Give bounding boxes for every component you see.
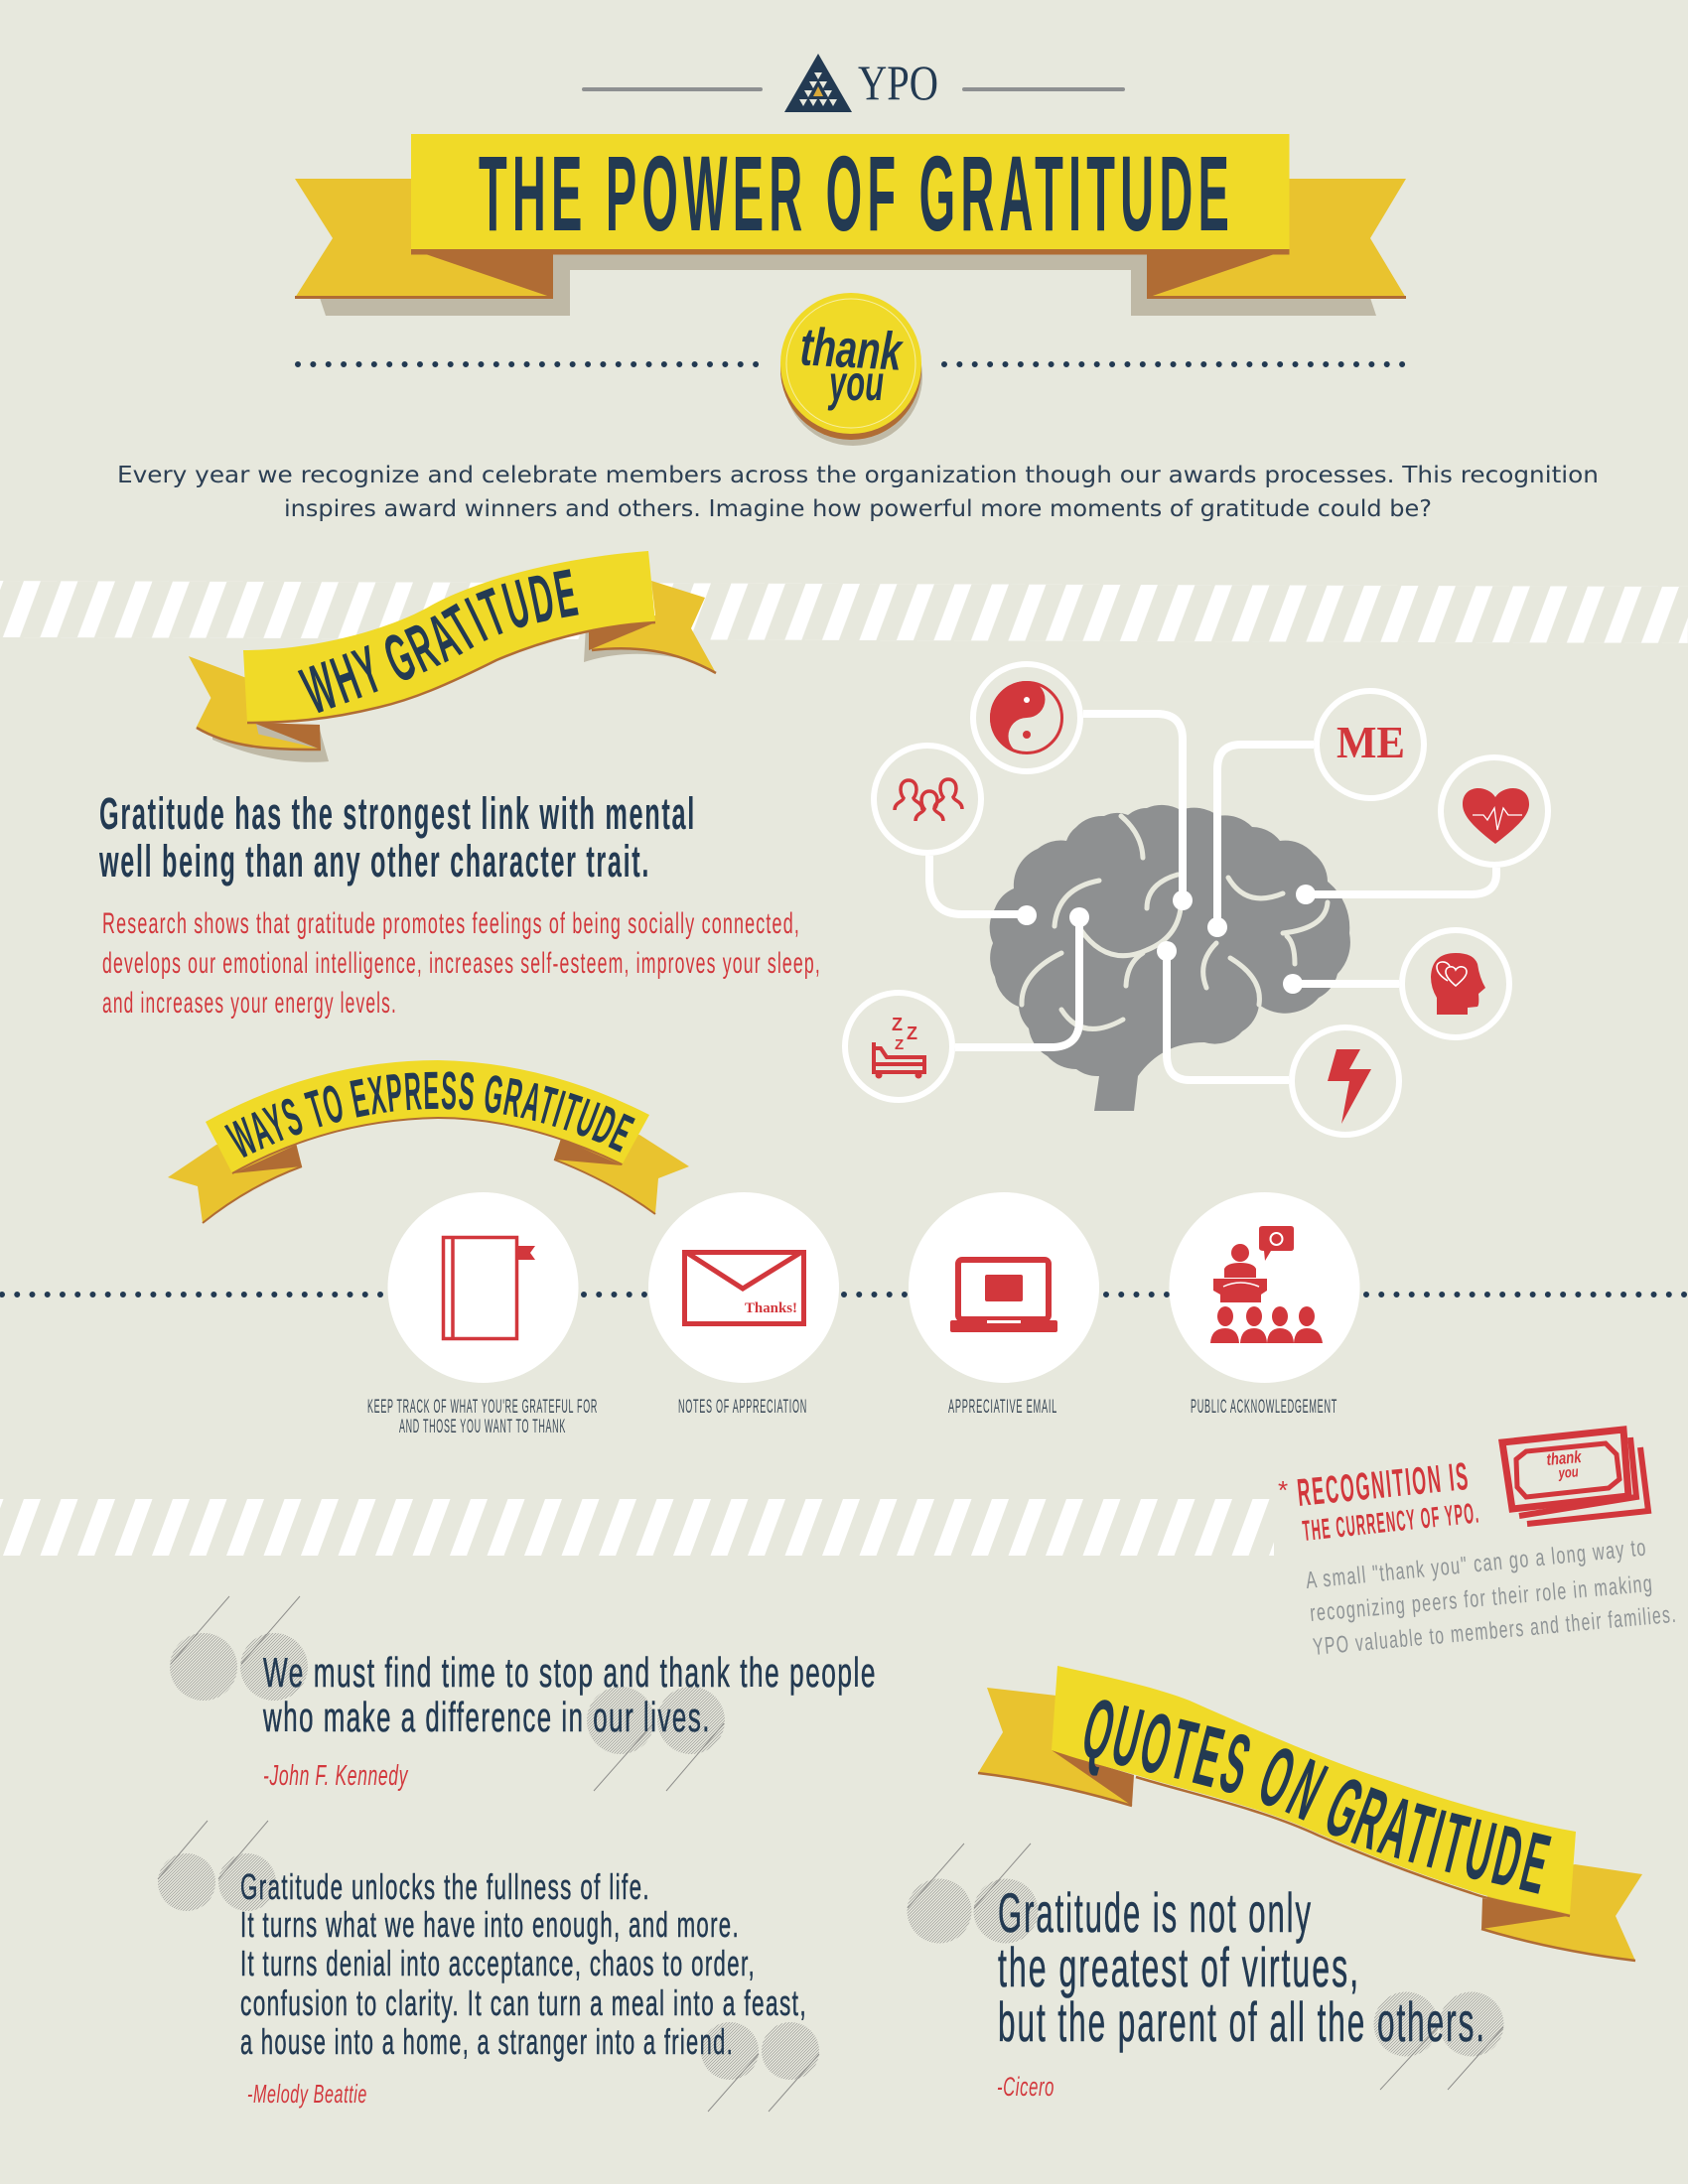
quote: Kennedy: -John F. Kennedy [263,1760,408,1792]
stripe band bottom [0,1499,1274,1556]
intro text: Every year we recognize and celebrate members across the organization though our awards processes. This recognition [117,463,1599,488]
quote: Melody Beattie: It turns denial into acceptance, chaos to order, [240,1943,756,1983]
research text: develops our emotional intelligence, increases self-esteem, improves your sleep, [102,947,821,980]
icon: bed: Z [892,1015,903,1034]
quote: Melody Beattie: Gratitude unlocks the fullness of life. [240,1866,650,1907]
logo: YPO: YPO [858,55,938,110]
ribbon text: why gratitude: WHY GRATITUDE [298,569,579,713]
item: appreciative email [909,1192,1099,1418]
ribbon: ways to express gratitude [168,1060,689,1224]
research text: Research shows that gratitude promotes feelings of being socially connected, [102,907,800,940]
quote: Melody Beattie: It turns what we have into enough, and more. [240,1904,740,1945]
callout: recognition: * [1278,1475,1288,1505]
icon: yin yang [973,664,1080,771]
icon: heart [1441,757,1548,865]
title banner [295,133,1406,316]
connector lines [929,714,1496,1080]
brain silhouette [990,805,1350,1111]
quote: Kennedy [170,1596,877,1792]
intro text: inspires award winners and others. Imagine how powerful more moments of gratitude could be? [284,496,1432,522]
quote: Cicero: the greatest of virtues, [998,1936,1360,1998]
icon: money stack [1502,1430,1648,1524]
quote marks [170,1596,725,1791]
research text: and increases your energy levels. [102,987,397,1020]
quote: Cicero [908,1843,1503,2102]
quote: Melody Beattie: a house into a home, a stranger into a friend. [240,2021,734,2062]
ribbon: quotes on gratitude [977,1666,1642,1962]
item: keep track journal: AND THOSE YOU WANT TO THANK [399,1417,566,1437]
item: notes of appreciation: NOTES OF APPRECIATION [678,1397,807,1418]
callout: recognition [1278,1430,1678,1661]
quote marks [158,1821,819,2112]
brain diagram [845,664,1548,1135]
quote: Cicero: -Cicero [997,2072,1055,2102]
icon: ME: ME [1336,717,1405,767]
item: appreciative email: APPRECIATIVE EMAIL [948,1397,1057,1418]
logo: YPO [582,54,1125,112]
text: KEEP TRACK OF WHAT YOU'RE GRATEFUL FOR [367,1397,598,1418]
dotted divider with thank-you coin [298,293,1404,446]
stripe band top [0,581,1688,643]
quote: Melody Beattie: confusion to clarity. It can turn a meal into a feast, [240,1982,807,2023]
item: public acknowledgement: PUBLIC ACKNOWLEDGEMENT [1191,1397,1337,1418]
headline: strongest link: Gratitude has the strongest link with mental [99,788,696,839]
quote marks [908,1843,1503,2090]
item: keep track journal [367,1192,598,1437]
icon: bed: Z [907,1024,917,1043]
item: notes of appreciation: Thanks! [745,1300,797,1316]
ribbon text: quotes on gratitude: QUOTES ON GRATITUDE [1084,1700,1552,1894]
icon: lightning bolt [1292,1027,1399,1135]
icon: bed: Z [895,1036,904,1053]
icon: head with hearts [1402,930,1509,1037]
headline: strongest link [98,788,696,887]
callout: recognition: RECOGNITION IS [1296,1455,1472,1515]
item: notes of appreciation [648,1192,839,1418]
dotted divider with thank-you coin: thank [798,317,906,382]
callout: recognition: you [1557,1463,1579,1482]
icon: bed [845,993,952,1100]
quote: Cicero: Gratitude is not only [998,1881,1313,1944]
research text [102,907,821,1020]
dotted line through circles [2,1292,1688,1297]
quote: Kennedy: who make a difference in our lives. [262,1694,711,1740]
icon: ME [1317,691,1424,798]
quote: Kennedy: We must find time to stop and thank the people [263,1649,877,1696]
quote: Melody Beattie [158,1821,819,2112]
intro text [117,463,1599,522]
ribbon text: ways to express gratitude: WAYS TO EXPRESS GRATITUDE [224,1071,635,1158]
ribbon: why gratitude [189,551,717,762]
quote: Melody Beattie: -Melody Beattie [247,2079,367,2109]
dotted divider with thank-you coin: you [827,355,884,411]
headline: strongest link: well being than any other character trait. [98,836,650,887]
icon: people [874,746,981,853]
callout: recognition: thank [1546,1447,1583,1469]
item: public acknowledgement [1170,1192,1360,1418]
